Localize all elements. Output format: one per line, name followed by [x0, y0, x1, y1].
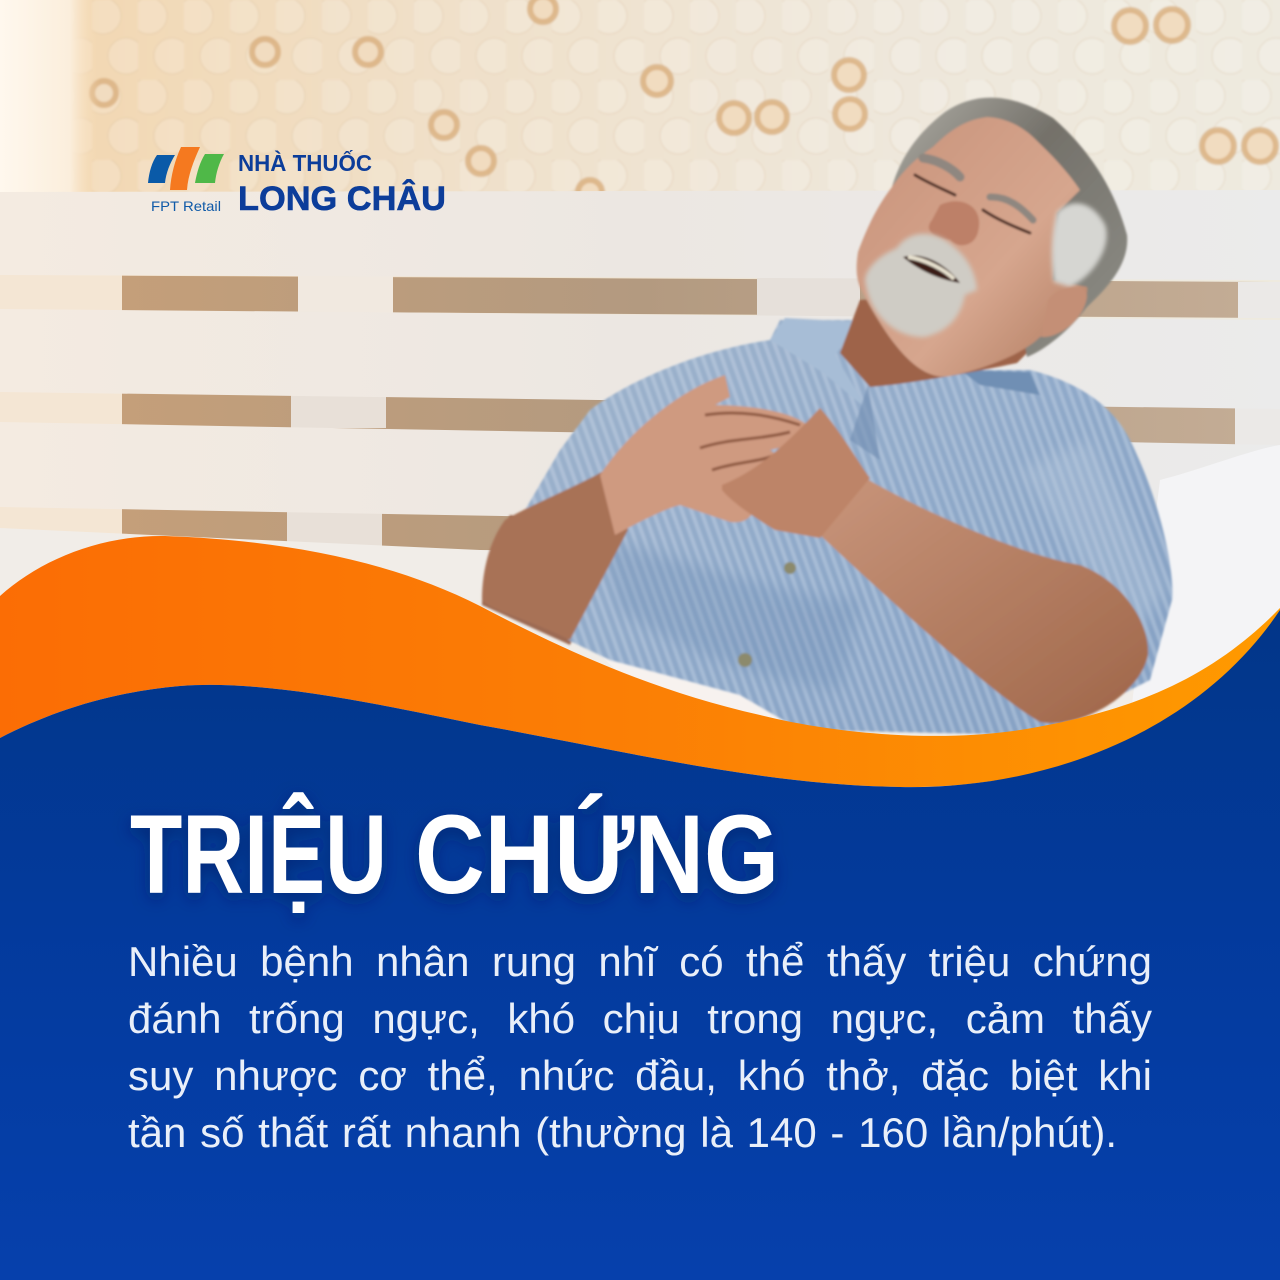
left upper arm: [482, 515, 620, 645]
logo: Nhà Thuốc Long Châu: [238, 149, 446, 218]
title: CHỨNG: [415, 792, 779, 917]
logo: Nhà Thuốc Long Châu: LONG CHÂU: [238, 180, 446, 218]
neck: [840, 290, 1040, 387]
logo: FPT Retail: FPT Retail: [151, 198, 221, 214]
white side hair: [1052, 203, 1107, 287]
wallpaper background: [0, 0, 1280, 560]
bed and pillow: [0, 445, 1280, 800]
mouth: [903, 255, 960, 283]
nose: [929, 201, 979, 245]
curtain: [0, 0, 100, 540]
logo: FPT Retail: [148, 147, 224, 214]
right hand: [722, 408, 870, 538]
blue panel: [0, 610, 1280, 1280]
beard: [865, 234, 977, 337]
ear: [1042, 287, 1087, 337]
left hand: [600, 375, 812, 535]
forearm lower left: [482, 470, 628, 640]
collar: [770, 318, 868, 410]
logo: Nhà Thuốc Long Châu: NHÀ THUỐC: [238, 149, 372, 176]
body text: suy nhược cơ thể, nhức đầu, khó thở, đặc biệt khi: [128, 1052, 1152, 1099]
head: [857, 117, 1087, 377]
title: [130, 792, 779, 917]
shirt: [525, 318, 1172, 735]
forearm: [810, 475, 1148, 723]
title: TRIỆU: [130, 792, 387, 917]
man: [482, 98, 1172, 735]
body text: đánh trống ngực, khó chịu trong ngực, cảm thấy: [128, 995, 1152, 1042]
eyebrows and eyes: [915, 158, 1033, 233]
buttons: [784, 562, 796, 574]
body text: tần số thất rất nhanh (thường là 140 - 160 lần/phút).: [128, 1109, 1117, 1156]
body text: [128, 938, 1152, 1156]
headboard: [0, 190, 1280, 560]
body text: Nhiều bệnh nhân rung nhĩ có thể thấy triệu chứng: [128, 938, 1152, 985]
hair back: [892, 98, 1127, 357]
orange wave: [0, 536, 1280, 787]
shirt shadow folds: [600, 540, 860, 690]
